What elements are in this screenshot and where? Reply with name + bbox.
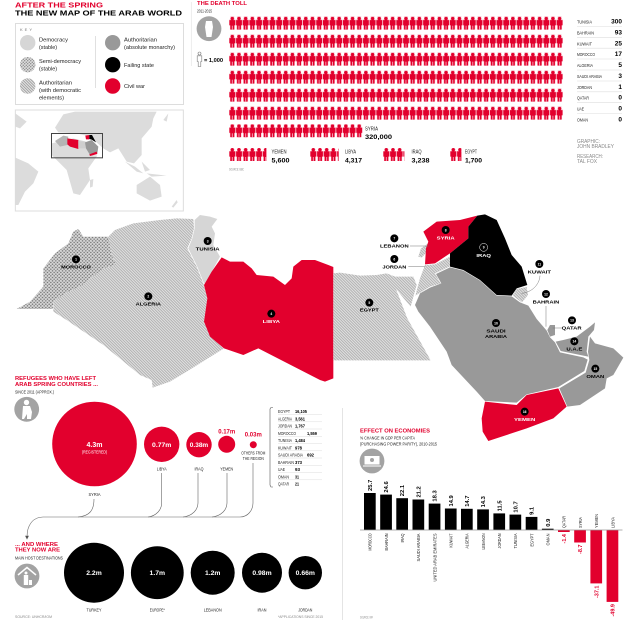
table: others breakdown: JORDAN xyxy=(278,424,292,428)
bar chart: GDP change: -1.4 xyxy=(562,533,568,543)
table: deaths in other countries: 25 xyxy=(615,40,622,47)
label: Oman: 15 xyxy=(593,367,597,371)
table: deaths in other countries: UAE xyxy=(577,106,584,112)
bubble: Yemen refugees: 0.17m xyxy=(218,430,235,436)
chart: Syria deaths pictogram: 320,000 xyxy=(365,134,392,141)
table: others breakdown: 16,105 xyxy=(295,409,307,414)
bubble: Yemen refugees xyxy=(218,430,235,473)
label: Morocco: MOROCCO xyxy=(61,265,92,270)
panel: key: Democracy xyxy=(39,38,68,44)
table: deaths in other countries xyxy=(577,18,622,123)
label: Kuwait: 11 xyxy=(538,262,541,266)
table: others breakdown: 1,484 xyxy=(295,438,305,443)
label: Morocco: 1 xyxy=(75,258,77,262)
bubble: Iraq refugees xyxy=(186,432,212,473)
bar chart: GDP change: 21.2 xyxy=(416,486,422,498)
label: Bahrain: BAHRAIN xyxy=(533,300,559,305)
heading: effect on economies xyxy=(360,428,437,448)
panel: key: (with democratic xyxy=(39,88,81,94)
bar chart: GDP change: -8.7 xyxy=(578,544,584,554)
heading: death toll xyxy=(197,1,247,14)
label: Qatar xyxy=(562,316,583,331)
label: Syria: 8 xyxy=(445,228,447,232)
icon: banknote xyxy=(360,449,384,473)
country: Oman xyxy=(559,337,623,407)
table: deaths in other countries: 0 xyxy=(618,106,622,112)
bubble: Turkey: TURKEY xyxy=(86,608,102,614)
panel: key: Authoritarian xyxy=(124,38,157,44)
bar chart: GDP change: ALGERIA xyxy=(465,533,471,548)
chart: Syria deaths pictogram: SYRIA xyxy=(365,126,379,132)
credits: RESEARCH: xyxy=(577,154,603,160)
bar chart: GDP change: 0.9 xyxy=(546,518,552,527)
country: Lebanon xyxy=(418,243,430,258)
label: UAE: 14 xyxy=(572,340,576,344)
table: deaths in other countries: BAHRAIN xyxy=(577,30,594,36)
bar chart: GDP change: BAHRAIN xyxy=(384,533,390,550)
title: AFTER THE SPRING xyxy=(15,0,103,9)
country: Iraq xyxy=(450,214,527,296)
source: refugees: SOURCE: UNHCR/IOM xyxy=(15,614,52,619)
bubble: Yemen refugees: YEMEN xyxy=(220,467,234,473)
label: Egypt xyxy=(360,299,379,313)
label: Jordan: 6 xyxy=(393,257,395,261)
bubble: others from the region: 0.03m xyxy=(245,433,262,439)
table: others breakdown: 373 xyxy=(295,460,302,465)
heading: death toll: THE DEATH TOLL xyxy=(197,1,247,7)
bubble: Syria refugees: (REGISTERED) xyxy=(82,450,107,454)
table: others breakdown: OMAN xyxy=(278,474,289,479)
chart: Egypt deaths: EGYPT xyxy=(465,150,477,156)
map: eastern Arab world xyxy=(333,214,623,441)
table: deaths in other countries: 5 xyxy=(618,62,622,69)
country: Morocco xyxy=(17,229,116,309)
country: Tunisia xyxy=(188,215,220,283)
table: deaths in other countries: 17 xyxy=(615,51,622,58)
bar chart: GDP change: SAUDI ARABIA xyxy=(416,533,422,562)
label: Bahrain: 12 xyxy=(544,292,548,296)
table: others breakdown: 21 xyxy=(295,482,299,487)
table: others breakdown: 31 xyxy=(295,474,299,479)
label: Qatar: 13 xyxy=(570,319,574,323)
table: deaths in other countries: 3 xyxy=(618,73,622,80)
heading: refugees: SINCE 2011 (APPROX.) xyxy=(15,389,54,395)
label: Jordan: JORDAN xyxy=(382,264,406,269)
chart: Yemen deaths: 5,600 xyxy=(272,158,290,164)
bubble: others from the region: OTHERS FROM xyxy=(241,450,265,456)
bar chart: GDP change: 14.7 xyxy=(465,496,471,507)
country: UAE xyxy=(556,322,595,357)
title xyxy=(15,0,183,17)
bubble: Syria refugees: 4.3m xyxy=(87,442,102,449)
bar chart: GDP change: 24.6 xyxy=(384,481,390,493)
credits: JOHN BRADLEY xyxy=(577,144,615,150)
table: deaths in other countries: JORDAN xyxy=(577,85,592,90)
table: deaths in other countries: 0 xyxy=(618,116,622,123)
table: deaths in other countries: MOROCCO xyxy=(577,52,595,57)
table: others breakdown: UAE xyxy=(278,467,285,472)
table: others breakdown: BAHRAIN xyxy=(278,460,294,465)
source: economies: SOURCE: IMF xyxy=(360,614,373,620)
bar chart: GDP change: 9.1 xyxy=(530,506,536,515)
bubble: Iran: 0.98m xyxy=(252,570,272,577)
table: deaths in other countries: ALGERIA xyxy=(577,63,593,68)
label: Lebanon: LEBANON xyxy=(380,244,409,249)
table: deaths in other countries: SAUDI ARABIA xyxy=(577,74,602,79)
bubble: Iran: IRAN xyxy=(258,608,267,614)
bubble: Libya refugees xyxy=(144,427,179,473)
bar chart: GDP change: 22.1 xyxy=(400,484,406,496)
bar chart: GDP change: 14.9 xyxy=(449,494,455,506)
table: deaths in other countries: TUNISIA xyxy=(577,20,592,24)
chart: Egypt deaths: 1,700 xyxy=(465,158,482,164)
legend: one person equals 1,000 xyxy=(197,52,223,66)
heading: refugees: REFUGEES WHO HAVE LEFT xyxy=(15,376,97,382)
label: Syria xyxy=(437,226,456,240)
panel: key: (absolute monarchy) xyxy=(124,45,175,51)
heading: where they are now: THEY NOW ARE xyxy=(15,548,61,554)
bubble: Jordan xyxy=(289,556,322,614)
legend: one person equals 1,000: = 1,000 xyxy=(204,58,223,64)
bubble: Syria refugees xyxy=(52,402,137,498)
heading: where they are now: MAIN HOST DESTINATIONS xyxy=(15,556,63,562)
country: Jordan xyxy=(415,257,451,296)
bubble: Iraq refugees: IRAQ xyxy=(194,467,204,473)
label: Kuwait: KUWAIT xyxy=(528,269,551,274)
table: deaths in other countries: QATAR xyxy=(577,96,589,100)
country: Libya xyxy=(204,257,333,382)
bar chart: GDP change: TUNISIA xyxy=(513,533,519,548)
label: Libya: 4 xyxy=(270,312,272,316)
panel: key: Semi-democracy xyxy=(39,59,81,65)
table: others breakdown: SAUDI ARABIA xyxy=(278,453,303,458)
label: Saudi Arabia: 10 xyxy=(494,321,498,325)
table: others breakdown xyxy=(270,408,322,487)
label: Tunisia: TUNISIA xyxy=(196,246,221,251)
label: Oman: OMAN xyxy=(586,374,604,379)
bar chart: GDP change: 11.5 xyxy=(497,500,503,511)
chart: Yemen deaths xyxy=(229,148,290,164)
table: others breakdown: 1,559 xyxy=(307,431,317,436)
bar chart: GDP change: -49.9 xyxy=(610,604,616,617)
panel: key: elements) xyxy=(39,95,64,101)
bar chart: GDP change: -37.1 xyxy=(594,586,600,598)
icon: refugee family xyxy=(14,397,39,422)
panel: key: (stable) xyxy=(39,45,57,51)
label: Yemen: YEMEN xyxy=(514,417,535,422)
bar chart: GDP change: JORDAN xyxy=(497,533,503,548)
label: Oman xyxy=(586,365,604,379)
table: others breakdown: EGYPT xyxy=(278,409,290,414)
label: Tunisia: 3 xyxy=(207,239,209,243)
footnote: applications: *APPLICATIONS SINCE 2015 xyxy=(278,614,324,619)
country: Yemen xyxy=(482,388,567,441)
chart: Libya deaths xyxy=(310,148,362,164)
source: death toll: SOURCE: BBC xyxy=(229,166,244,172)
label: Egypt: 5 xyxy=(368,301,370,305)
heading: refugees: ARAB SPRING COUNTRIES ... xyxy=(15,382,99,388)
label: Iraq xyxy=(476,243,492,258)
bubble: others from the region xyxy=(241,433,265,461)
bubble: Syria refugees: SYRIA xyxy=(88,492,101,498)
bubble: others from the region: THE REGION xyxy=(243,456,264,461)
heading: refugees xyxy=(15,376,99,395)
connector lines xyxy=(26,463,253,539)
heading: effect on economies: EFFECT ON ECONOMIES xyxy=(360,428,431,434)
label: Morocco xyxy=(61,255,92,270)
bar chart: GDP change: UNITED ARAB EMIRATES xyxy=(432,534,438,582)
country: Saudi Arabia xyxy=(415,267,588,403)
label: Jordan xyxy=(382,255,406,269)
label: Algeria xyxy=(136,292,162,307)
icon: shelter xyxy=(15,564,39,588)
chart: Libya deaths: 4,317 xyxy=(345,158,362,164)
bar chart: GDP change: LIBYA xyxy=(610,516,616,528)
bubble: Europe: EUROPE* xyxy=(150,608,165,614)
leader lines xyxy=(408,246,562,328)
table: others breakdown: 1,767 xyxy=(295,424,305,428)
table: others breakdown: MOROCCO xyxy=(278,431,296,436)
heading: where they are now: ... AND WHERE xyxy=(15,542,59,548)
label: Lebanon xyxy=(380,234,409,249)
bar chart: GDP change: 18.3 xyxy=(433,490,439,502)
heading: where they are now xyxy=(15,542,63,562)
bar chart: GDP change: LEBANON xyxy=(481,533,487,550)
label: Libya xyxy=(263,310,281,324)
bubble: Libya refugees: 0.77m xyxy=(152,442,171,449)
bar chart: GDP change: IRAQ xyxy=(400,533,406,542)
label: Syria: SYRIA xyxy=(437,235,456,240)
bubble: Jordan: 0.66m xyxy=(296,570,315,577)
heading: effect on economies: % CHANGE IN GDP PER CAPITA xyxy=(360,436,416,442)
table: deaths in other countries: 93 xyxy=(615,30,622,36)
bubble: Iraq refugees: 0.38m xyxy=(190,442,208,449)
bar chart: GDP change: YEMEN xyxy=(594,514,600,528)
bar chart: GDP change: SYRIA xyxy=(578,516,584,528)
chart: Egypt deaths xyxy=(450,148,482,164)
label: Algeria: 2 xyxy=(147,295,149,299)
label: Kuwait xyxy=(528,260,551,274)
panel: locator world map xyxy=(15,110,183,211)
table: others breakdown: KUWAIT xyxy=(278,445,292,450)
bar chart: GDP change: 14.3 xyxy=(481,495,487,507)
table: others breakdown: 978 xyxy=(295,445,302,450)
label: UAE xyxy=(566,337,582,352)
bar chart: GDP change: 25.7 xyxy=(368,480,374,491)
label: Yemen: 16 xyxy=(523,410,527,414)
bubble: Europe xyxy=(131,546,184,614)
table: deaths in other countries: KUWAIT xyxy=(577,41,592,46)
table: others breakdown: ALGERIA xyxy=(278,416,292,421)
bubble: Europe: 1.7m xyxy=(150,570,165,577)
table: others breakdown: 3,561 xyxy=(295,416,305,421)
title: THE NEW MAP OF THE ARAB WORLD xyxy=(15,8,183,17)
bar chart: GDP change xyxy=(360,480,622,617)
label: Saudi Arabia: SAUDI xyxy=(486,328,506,333)
chart: Syria deaths pictogram xyxy=(229,17,563,141)
chart: Libya deaths: LIBYA xyxy=(345,150,357,156)
label: Algeria: ALGERIA xyxy=(136,302,162,307)
bubble: Jordan: JORDAN xyxy=(298,608,313,614)
table: others breakdown: 692 xyxy=(307,453,314,458)
credits: TAL FOX xyxy=(577,159,598,165)
bar chart: GDP change: EGYPT xyxy=(529,533,535,546)
bubble: Turkey: 2.2m xyxy=(86,570,102,577)
bubble: Lebanon xyxy=(191,551,235,614)
bar chart: GDP change: OMAN xyxy=(546,533,552,546)
bubble: Lebanon: LEBANON xyxy=(204,608,222,614)
credits: GRAPHIC: xyxy=(577,139,600,145)
heading: death toll: 2011-2015 xyxy=(197,8,212,14)
bubble: Iran xyxy=(242,553,282,614)
table: deaths in other countries: 1 xyxy=(618,84,622,91)
panel: key: KEY xyxy=(20,27,32,32)
bubble: Lebanon: 1.2m xyxy=(205,570,220,577)
panel: key: Failing state xyxy=(124,63,154,69)
bar chart: GDP change: KUWAIT xyxy=(449,533,455,548)
label: Libya: LIBYA xyxy=(263,319,281,324)
bar chart: GDP change: QATAR xyxy=(562,516,568,528)
country: Qatar xyxy=(547,325,555,337)
label: UAE: U.A.E xyxy=(566,347,582,352)
heading: effect on economies: (PURCHASING POWER PARITY), 2010-2015 xyxy=(360,442,437,448)
panel: key xyxy=(16,24,184,104)
country: Syria xyxy=(423,216,477,264)
table: deaths in other countries: 0 xyxy=(618,94,622,102)
panel: key: Authoritarian xyxy=(39,80,72,86)
table: deaths in other countries: 300 xyxy=(611,18,622,26)
label: Qatar: QATAR xyxy=(562,326,583,331)
chart: Iraq deaths: IRAQ xyxy=(412,150,422,156)
label: Tunisia xyxy=(196,237,221,251)
country: Algeria xyxy=(53,218,224,388)
country: Kuwait xyxy=(513,287,528,302)
bubble: Turkey xyxy=(64,543,124,614)
bar chart: GDP change: 10.7 xyxy=(513,501,519,513)
country: Egypt xyxy=(333,273,431,360)
bar chart: GDP change: MOROCCO xyxy=(368,533,374,550)
label: Saudi Arabia: ARABIA xyxy=(485,334,508,339)
map: western Arab world xyxy=(17,215,333,388)
icon: death toll urn xyxy=(197,16,221,41)
chart: Yemen deaths: YEMEN xyxy=(272,150,287,156)
chart: Iraq deaths xyxy=(383,148,430,164)
label: Egypt: EGYPT xyxy=(360,308,379,313)
table: others breakdown: QATAR xyxy=(278,482,289,487)
bubble: Libya refugees: LIBYA xyxy=(157,467,167,473)
panel: key: (stable) xyxy=(39,66,57,72)
label: Lebanon: 7 xyxy=(393,237,395,241)
label: Iraq: IRAQ xyxy=(476,253,492,258)
chart: Iraq deaths: 3,238 xyxy=(412,158,430,164)
table: deaths in other countries: OMAN xyxy=(577,117,588,122)
label: Bahrain xyxy=(533,290,559,305)
table: others breakdown: 93 xyxy=(295,467,300,472)
panel: key: Civil war xyxy=(124,84,145,90)
label: Yemen xyxy=(514,408,535,422)
credits xyxy=(577,139,615,165)
label: Saudi Arabia xyxy=(485,319,508,339)
table: others breakdown: TUNISIA xyxy=(278,438,292,443)
label: Iraq: 9 xyxy=(483,246,485,250)
